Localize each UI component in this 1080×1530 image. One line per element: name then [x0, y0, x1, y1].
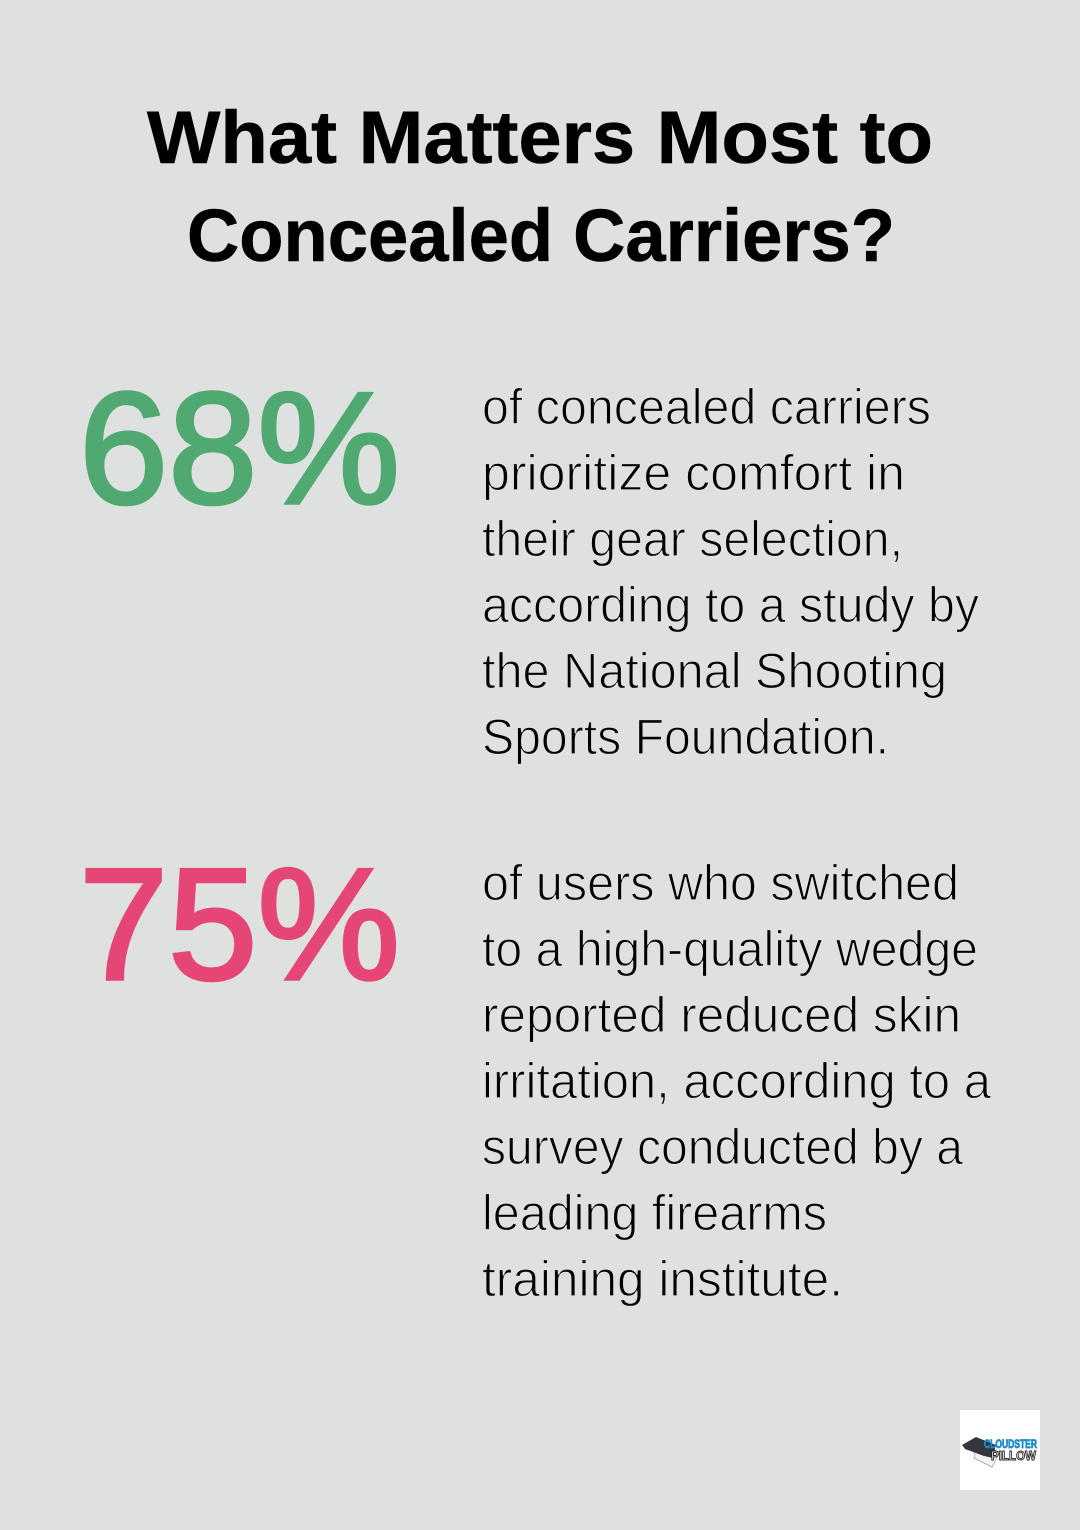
- text block: skin irritation statistic: training institute.: [482, 1251, 843, 1307]
- text block: skin irritation statistic: [482, 855, 991, 1307]
- text block: comfort statistic: Sports Foundation.: [482, 709, 889, 765]
- text block: comfort statistic: the National Shooting: [482, 643, 947, 699]
- logo wordmark: PILLOW: [991, 1448, 1037, 1463]
- text block: skin irritation statistic: of users who switched: [482, 855, 959, 911]
- text block: comfort statistic: [482, 379, 979, 765]
- text block: skin irritation statistic: irritation, according to a: [482, 1053, 991, 1109]
- logo: Cloudster Pillow: [960, 1410, 1040, 1490]
- title: Concealed Carriers?: [187, 194, 895, 277]
- title: What Matters Most to: [147, 96, 933, 179]
- text block: skin irritation statistic: reported reduced skin: [482, 987, 961, 1043]
- logo wordmark: CLOUDSTER: [984, 1437, 1037, 1451]
- text block: skin irritation statistic: survey conducted by a: [482, 1119, 963, 1175]
- text block: skin irritation statistic: leading firearms: [482, 1185, 827, 1241]
- text block: comfort statistic: of concealed carriers: [482, 379, 931, 435]
- text block: comfort statistic: their gear selection,: [482, 511, 903, 567]
- title: [147, 96, 933, 277]
- stat: 75%: 75%: [79, 835, 400, 1013]
- text block: comfort statistic: according to a study by: [482, 577, 979, 633]
- stat: 68%: 68%: [79, 359, 400, 537]
- text block: skin irritation statistic: to a high-quality wedge: [482, 921, 978, 977]
- logo wordmark: [984, 1437, 1037, 1463]
- text block: comfort statistic: prioritize comfort in: [482, 445, 905, 501]
- icon: pillow: [962, 1437, 1000, 1467]
